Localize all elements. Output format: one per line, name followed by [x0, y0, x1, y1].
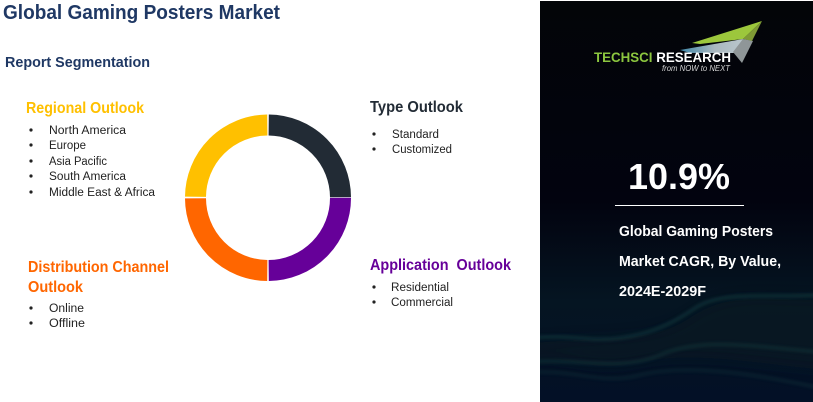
- logo arrow mark: [680, 21, 762, 63]
- list: channels: Offline: [49, 318, 85, 330]
- statistic description: Global Gaming Posters: [619, 224, 773, 240]
- panel: type outlook: [370, 99, 463, 156]
- panel: distribution channel outlook: [28, 259, 169, 330]
- title: Global Gaming Posters Market: [3, 2, 280, 24]
- heading: regional outlook: Regional Outlook: [26, 100, 144, 117]
- heading: distribution channel outlook: Distribution Channel: [28, 259, 169, 276]
- list: applications: Commercial: [391, 297, 453, 309]
- list: regions: South America: [49, 171, 127, 183]
- list: channels: Online: [49, 303, 84, 315]
- list: regions: [29, 125, 156, 199]
- list: types: [372, 129, 452, 156]
- panel: application outlook: [370, 257, 511, 309]
- list: regions: Asia Pacific: [49, 156, 107, 168]
- list: channels: [29, 303, 85, 330]
- panel: dark statistics: [520, 1, 813, 402]
- heading: type outlook: Type Outlook: [370, 99, 463, 116]
- panel: regional outlook: [26, 100, 156, 199]
- statistic: CAGR value: 10.9%: [628, 156, 730, 197]
- logo wordmark: TECHSCI RESEARCH: [594, 50, 731, 65]
- list: types: Customized: [392, 144, 452, 156]
- statistic description: Market CAGR, By Value,: [619, 254, 781, 270]
- list: types: Standard: [392, 129, 439, 141]
- logo: TechSci Research: [594, 21, 762, 73]
- list: regions: North America: [49, 125, 127, 137]
- list: applications: [372, 282, 453, 309]
- donut chart: [196, 125, 341, 270]
- list: applications: Residential: [391, 282, 449, 294]
- heading: distribution channel outlook: Outlook: [28, 279, 83, 296]
- divider line: [615, 205, 744, 206]
- statistic description: [619, 224, 781, 300]
- statistic description: 2024E-2029F: [619, 284, 706, 300]
- list: regions: Middle East & Africa: [49, 187, 156, 199]
- panel background: [540, 1, 813, 402]
- list: regions: Europe: [49, 140, 86, 152]
- heading: application outlook: Application Outlook: [370, 257, 511, 274]
- logo tagline: from NOW to NEXT: [662, 64, 731, 73]
- decorative particle waves: [520, 295, 813, 388]
- subheading: report segmentation: Report Segmentation: [5, 54, 150, 71]
